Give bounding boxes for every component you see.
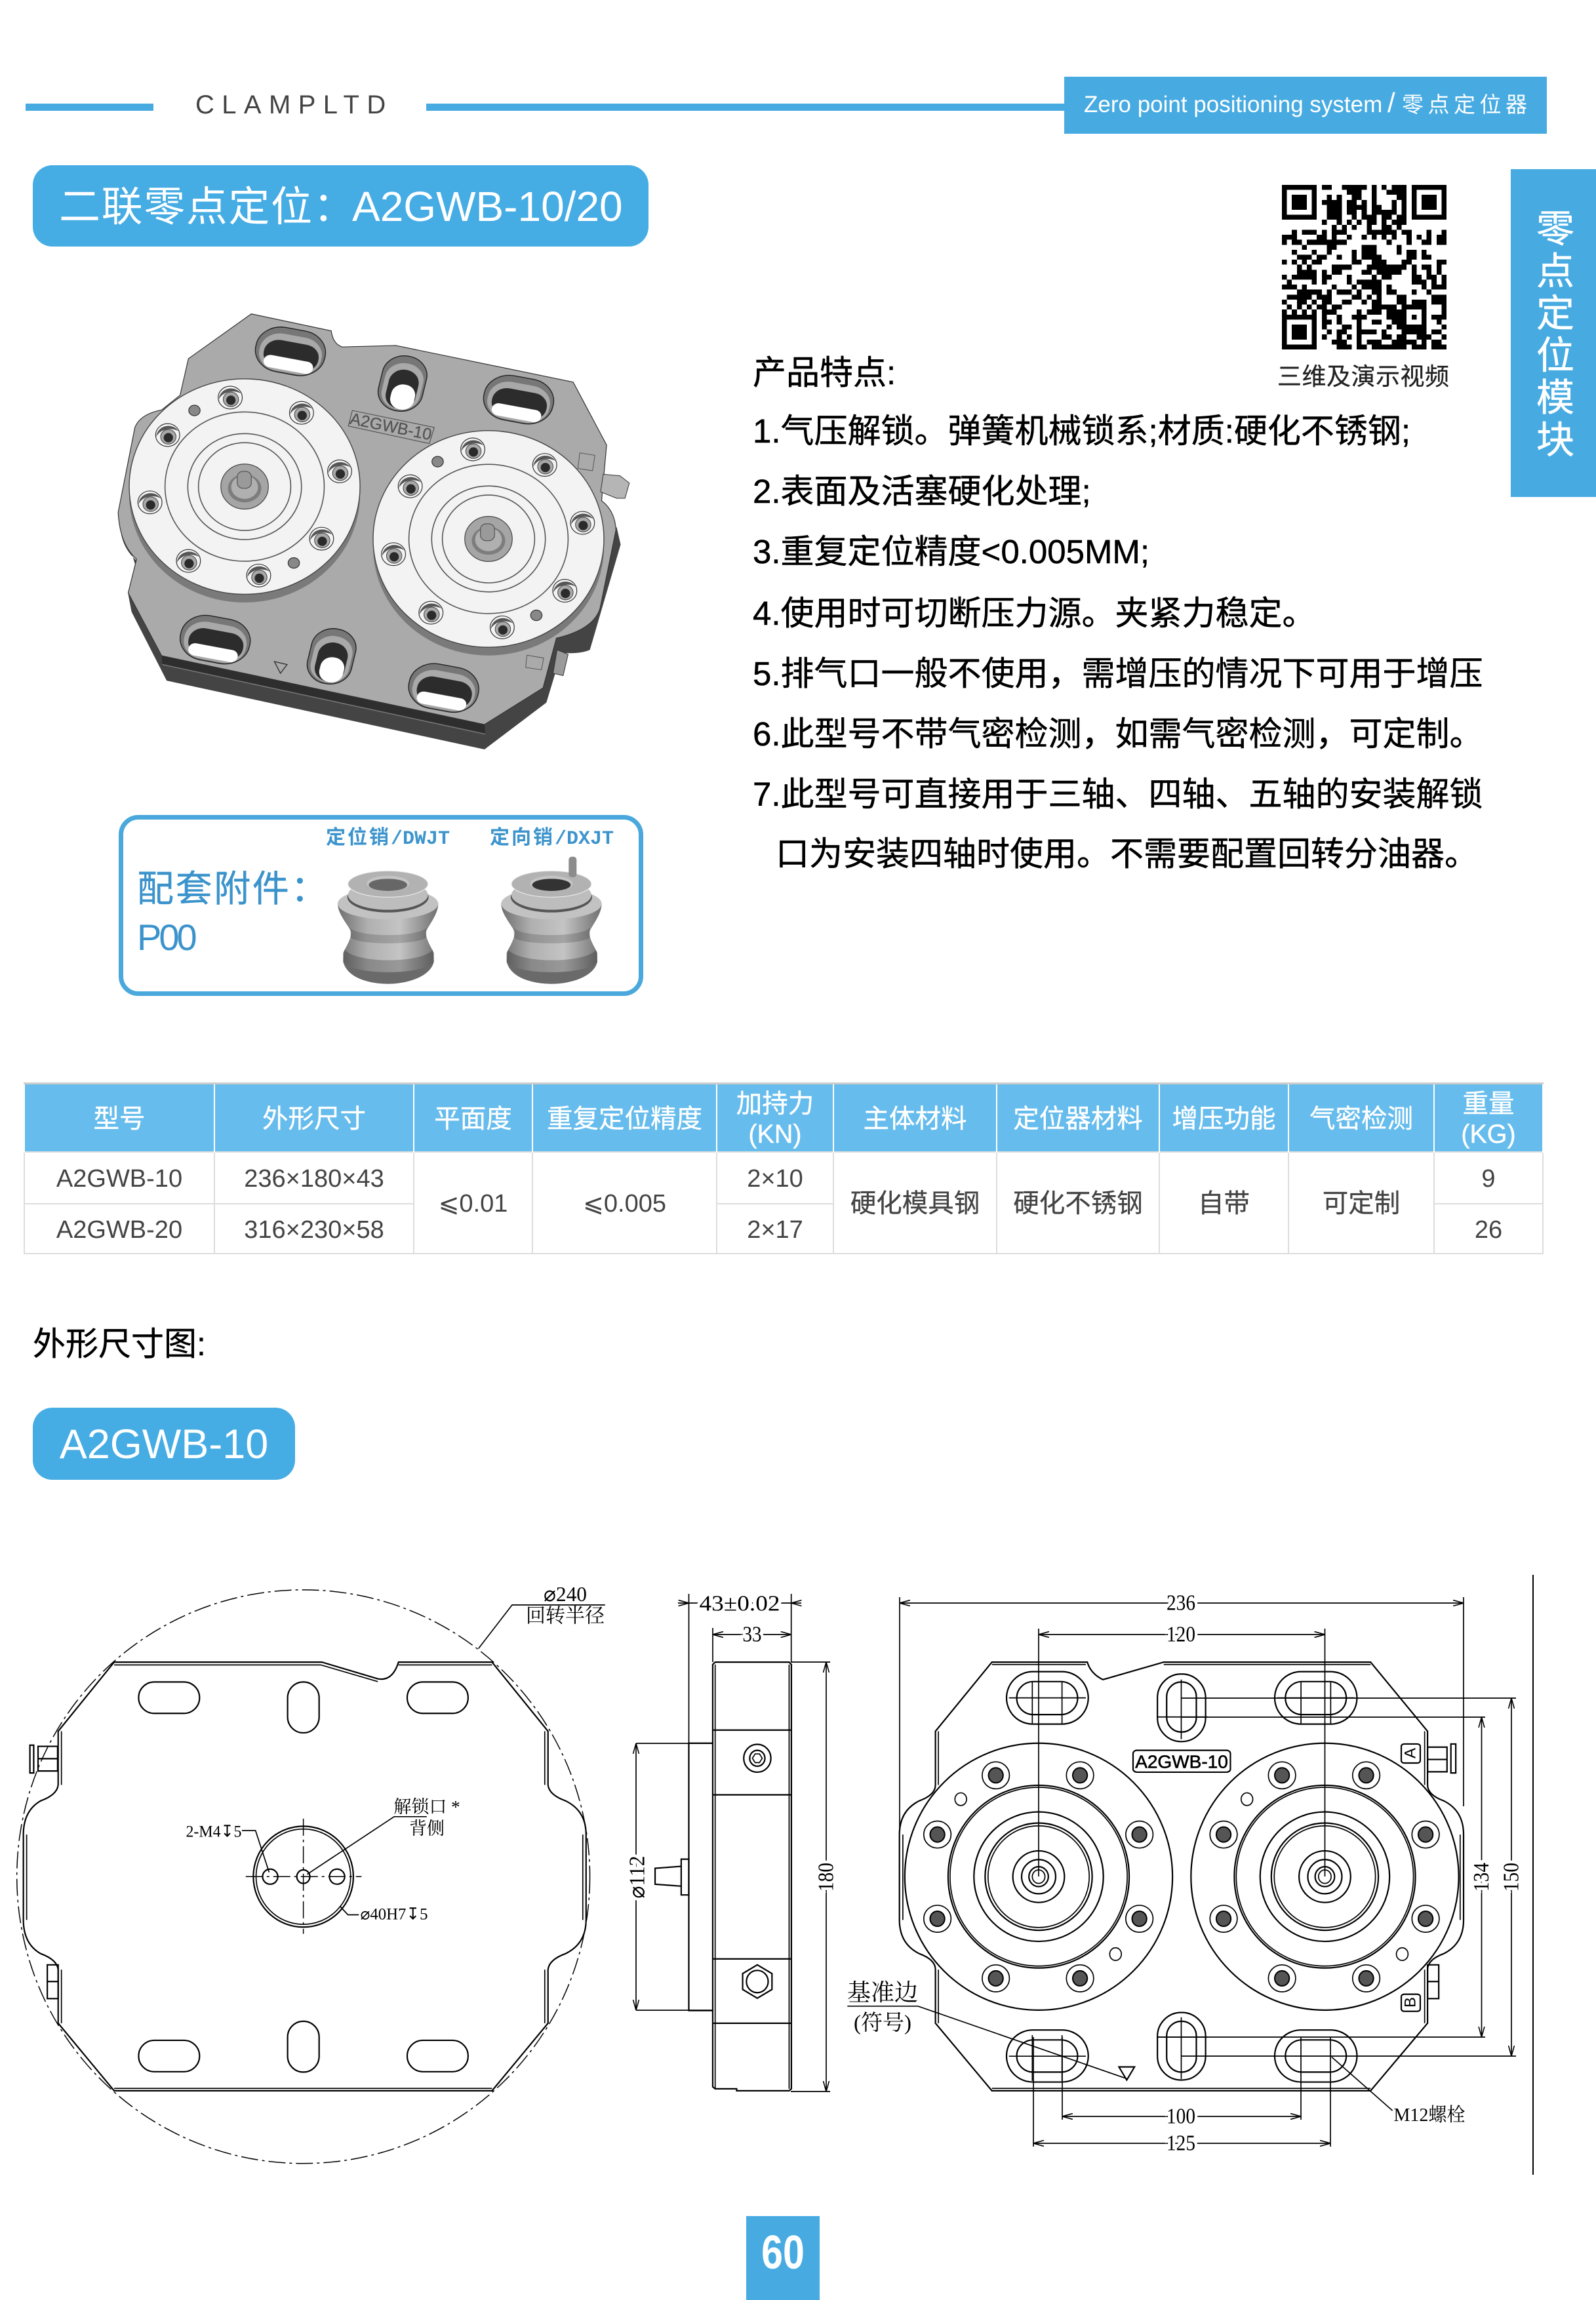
plate engraved model: A2GWB-10 bbox=[348, 410, 433, 444]
spec table: 硬化模具钢 bbox=[850, 1189, 980, 1218]
page edge rule bbox=[1532, 1575, 1534, 2175]
back view labels bbox=[186, 1582, 605, 1924]
drawing: back view bbox=[17, 1590, 791, 2164]
spec table: (KG) bbox=[1461, 1120, 1516, 1149]
mounting slots bbox=[138, 1682, 468, 2072]
feature 7: 7.此型号可直接用于三轴、四轴、五轴的安装解锁 bbox=[753, 776, 1483, 813]
header banner bbox=[1064, 77, 1547, 134]
banner english text: Zero point positioning system bbox=[1084, 92, 1382, 117]
front view labels: (符号) bbox=[854, 2011, 911, 2035]
QR code bbox=[1282, 185, 1446, 349]
QR caption: 三维及演示视频 bbox=[1277, 363, 1449, 390]
model pill bbox=[33, 1408, 295, 1480]
back view labels: ⌀40H7↧5 bbox=[361, 1905, 428, 1924]
slots bbox=[176, 323, 558, 717]
front view dimensions: 236 bbox=[1167, 1591, 1195, 1616]
front view labels: A2GWB-10 bbox=[1135, 1752, 1228, 1772]
spec table: 2×10 bbox=[747, 1165, 803, 1193]
front view dimensions: 100 bbox=[1167, 2105, 1195, 2128]
spec table: ⩽0.01 bbox=[439, 1190, 508, 1218]
feature 1: 1.气压解锁。弹簧机械锁系;材质:硬化不锈钢; bbox=[753, 412, 1410, 450]
left chuck disc bbox=[129, 379, 360, 603]
header: left rule bbox=[26, 104, 153, 111]
front view labels: M12螺栓 bbox=[1394, 2104, 1465, 2126]
QR finder patterns bbox=[1282, 185, 1446, 349]
side tab bbox=[1511, 169, 1596, 497]
side view dimensions: 180 bbox=[814, 1863, 838, 1892]
back view labels: ⌀240 bbox=[544, 1582, 587, 1606]
spec table: 气密检测 bbox=[1309, 1105, 1413, 1134]
feature 6: 6.此型号不带气密检测，如需气密检测，可定制。 bbox=[753, 715, 1483, 753]
front view dimensions: 120 bbox=[1167, 1622, 1195, 1647]
pin label: DWJT: 定位销/DWJT bbox=[326, 827, 450, 850]
accessory panel bbox=[119, 815, 643, 996]
title model: A2GWB-10/20 bbox=[352, 183, 623, 230]
plate top face bbox=[118, 314, 616, 724]
air fittings and marks bbox=[274, 410, 629, 675]
spec table: A2GWB-20 bbox=[56, 1216, 182, 1243]
right disc bolts bbox=[1210, 1762, 1439, 1992]
back view labels: 背侧 bbox=[409, 1819, 445, 1838]
front view dimensions bbox=[900, 1591, 1524, 2156]
front view labels bbox=[847, 1748, 1465, 2126]
spec table: 外形尺寸 bbox=[262, 1105, 366, 1134]
back view leaders bbox=[242, 1605, 605, 1914]
datum and bolt leaders bbox=[847, 2006, 1393, 2111]
spec table: (KN) bbox=[748, 1120, 802, 1149]
side view dimensions: ⌀112 bbox=[626, 1855, 649, 1899]
back view plate outline bbox=[24, 1662, 586, 2091]
spec table: 增压功能 bbox=[1172, 1105, 1276, 1134]
feature 7 continued: 口为安装四轴时使用。不需要配置回转分油器。 bbox=[776, 835, 1478, 873]
back view labels: 解锁口 * bbox=[393, 1797, 460, 1817]
model plate and port marks bbox=[1133, 1744, 1456, 2012]
page number text: 60 bbox=[761, 2227, 805, 2279]
accessory pin DWJT bbox=[338, 871, 438, 984]
front view dimensions: 134 bbox=[1469, 1863, 1494, 1892]
spec table: 硬化不锈钢 bbox=[1013, 1189, 1143, 1218]
title pill bbox=[33, 165, 648, 247]
plate edge lines bbox=[27, 1665, 583, 2088]
spec table: 可定制 bbox=[1323, 1189, 1400, 1218]
central bore and holes bbox=[246, 1819, 361, 1934]
left chuck bolts bbox=[138, 386, 351, 587]
spec table: 2×17 bbox=[747, 1216, 803, 1243]
banner slash: / bbox=[1387, 87, 1395, 118]
front view labels: 基准边 bbox=[847, 1979, 918, 2006]
slot centre lines bbox=[1009, 1680, 1355, 2081]
spec table: 26 bbox=[1475, 1216, 1502, 1243]
swing radius circle bbox=[17, 1590, 590, 2164]
front view labels: B bbox=[1402, 1997, 1419, 2008]
side tab text: 零点定位模块 bbox=[1530, 208, 1573, 462]
plate dark base bbox=[118, 512, 621, 749]
spec table: 236×180×43 bbox=[244, 1165, 384, 1193]
front view dimensions: 150 bbox=[1499, 1863, 1524, 1892]
spec table: 加持力 bbox=[736, 1090, 814, 1119]
spec table: 316×230×58 bbox=[244, 1216, 384, 1243]
spec table: 定位器材料 bbox=[1013, 1105, 1143, 1134]
header: right rule bbox=[426, 104, 1069, 111]
spec table: 9 bbox=[1481, 1165, 1496, 1193]
accessory heading: 配套附件： bbox=[137, 868, 329, 909]
front view dimensions: 125 bbox=[1167, 2131, 1195, 2156]
datum triangle bbox=[1119, 2067, 1134, 2080]
right chuck disc bbox=[373, 431, 604, 656]
side view dimensions: 33 bbox=[742, 1622, 762, 1647]
spec table: ⩽0.005 bbox=[583, 1190, 666, 1218]
dimension section heading: 外形尺寸图: bbox=[33, 1326, 206, 1362]
page number bbox=[746, 2216, 820, 2300]
spec table: 自带 bbox=[1198, 1189, 1250, 1218]
QR data modules bbox=[1282, 188, 1446, 347]
side fittings bbox=[30, 1745, 58, 1998]
back view labels: 回转半径 bbox=[526, 1605, 605, 1627]
title chinese: 二联零点定位： bbox=[59, 184, 355, 230]
banner chinese text: 零点定位器 bbox=[1402, 92, 1532, 117]
accessory pin DXJT bbox=[501, 857, 602, 984]
model pill: A2GWB-10 bbox=[60, 1421, 268, 1467]
product features bbox=[753, 354, 1483, 873]
spec table: 重复定位精度 bbox=[547, 1105, 702, 1134]
right chuck bolts bbox=[382, 438, 595, 639]
back view labels: 2-M4↧5 bbox=[186, 1823, 241, 1841]
side view body bbox=[655, 1662, 791, 2091]
side view dimensions: 43±0.02 bbox=[699, 1592, 780, 1616]
right locator disc bbox=[1191, 1743, 1459, 2010]
spec table: 型号 bbox=[93, 1105, 146, 1134]
feature 5: 5.排气口一般不使用，需增压的情况下可用于增压 bbox=[753, 655, 1483, 692]
spec table: A2GWB-10 bbox=[56, 1165, 182, 1193]
front plate edges bbox=[903, 1665, 1460, 2088]
left locator disc bbox=[905, 1743, 1172, 2010]
spec table: 重量 bbox=[1462, 1090, 1515, 1119]
plate side strip bbox=[162, 656, 485, 734]
drawing: front view bbox=[847, 1662, 1464, 2111]
pin label: DXJT: 定向销/DXJT bbox=[490, 827, 614, 850]
side view dimensions bbox=[626, 1592, 838, 2092]
header: brand name: CLAMPLTD bbox=[195, 90, 393, 119]
spec table: 主体材料 bbox=[863, 1105, 967, 1134]
front slots bbox=[1007, 1672, 1357, 2082]
spec table bbox=[24, 1082, 1544, 1254]
feature 4: 4.使用时可切断压力源。夹紧力稳定。 bbox=[753, 595, 1316, 632]
spec table: 平面度 bbox=[434, 1105, 512, 1134]
left disc bolts bbox=[924, 1762, 1153, 1992]
feature heading: 产品特点: bbox=[753, 354, 896, 391]
front view labels: A bbox=[1402, 1748, 1419, 1758]
feature 2: 2.表面及活塞硬化处理; bbox=[753, 473, 1091, 510]
accessory code: P00 bbox=[137, 917, 195, 958]
feature 3: 3.重复定位精度<0.005MM; bbox=[753, 533, 1149, 570]
front plate outline bbox=[900, 1662, 1464, 2091]
